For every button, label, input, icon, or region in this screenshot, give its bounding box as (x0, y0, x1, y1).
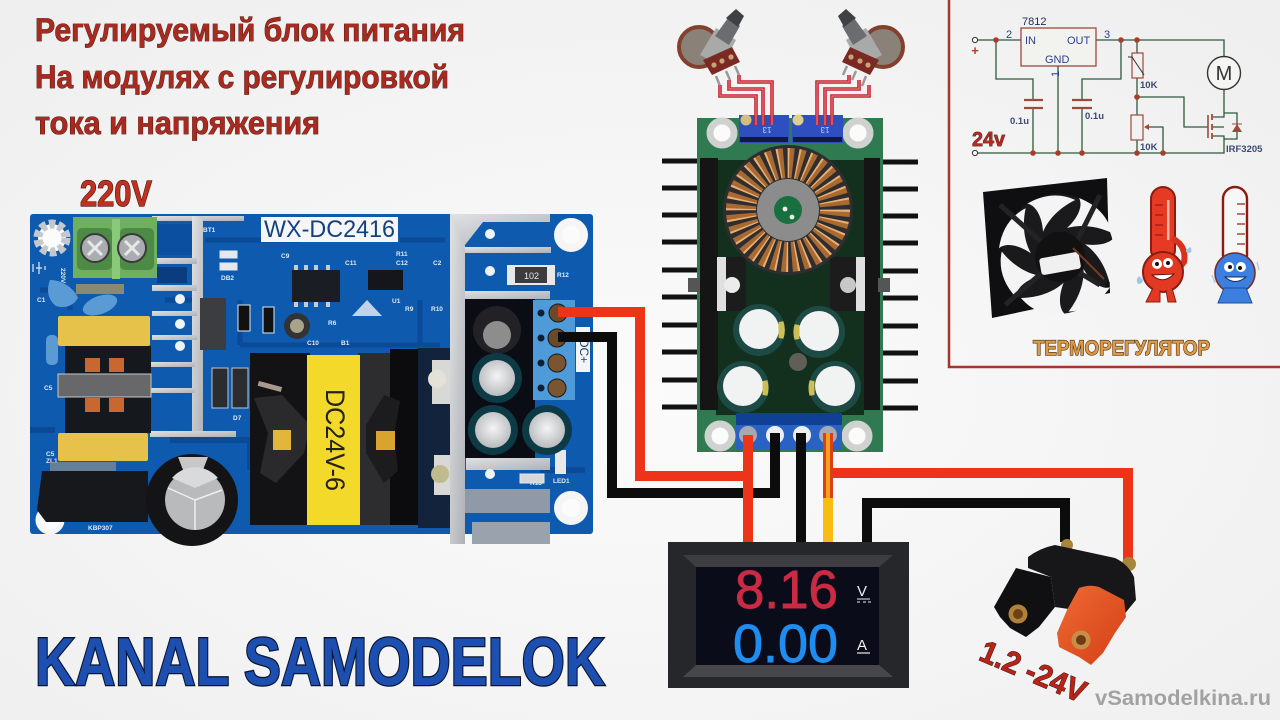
thermistor: 10K (1140, 80, 1158, 91)
icon: hot thermometer (1137, 187, 1192, 302)
bridge rectifier (37, 462, 148, 522)
trimmer: 10K (1140, 142, 1158, 153)
pcb base (30, 214, 593, 534)
regulator chip: 7812 (1022, 16, 1046, 28)
model label: WX-DC2416 (264, 216, 395, 243)
silkscreen labels: R2 (224, 265, 233, 272)
MOSFET (1208, 114, 1263, 155)
DC output terminal block: -DC+ (577, 335, 591, 363)
label: output voltage range: 1.2 -24V (975, 634, 1092, 710)
junction nodes (993, 37, 1166, 156)
silkscreen labels: KBP307 (88, 525, 113, 532)
circuit diagram: + (971, 43, 979, 58)
silkscreen labels: C1 (37, 297, 46, 304)
silkscreen labels: R11 (396, 251, 408, 258)
panel: DC-DC step-down module (662, 114, 918, 452)
mount pads (38, 222, 584, 532)
silkscreen labels: C12 (396, 260, 408, 267)
AC terminal block (73, 217, 157, 279)
blue X capacitors (46, 280, 120, 365)
silkscreen labels: R12 (557, 272, 569, 279)
mount holes (708, 121, 870, 448)
black post (994, 568, 1055, 637)
watermark: vSamodelkina.ru (1095, 687, 1271, 710)
SMD parts and ICs (200, 251, 566, 483)
green board (697, 118, 883, 452)
unit labels: V (857, 583, 867, 600)
silkscreen labels (37, 227, 570, 532)
blue trimmers (739, 114, 843, 143)
trimmer (1131, 115, 1158, 153)
unit labels (857, 583, 871, 654)
current reading: 0.00 (733, 614, 838, 674)
silkscreen labels: C5 (44, 385, 53, 392)
silkscreen labels: BT1 (203, 227, 216, 234)
silkscreen labels: R5 (224, 253, 233, 260)
regulator chip (1006, 16, 1110, 77)
blue trimmers: 13 (820, 125, 829, 134)
panel: thermostat (949, 0, 1280, 367)
silkscreen labels: U1 (392, 298, 401, 305)
title: тока и напряжения (35, 105, 320, 141)
wires between supply and module (558, 312, 1128, 562)
silkscreen labels: D7 (233, 415, 242, 422)
regulator chip: 3 (1104, 29, 1110, 41)
silkscreen labels: C5 (46, 451, 55, 458)
silkscreen labels: DB2 (221, 275, 234, 282)
common mode choke (58, 346, 151, 433)
circuit diagram (971, 16, 1263, 156)
panel border (949, 0, 1280, 367)
yellow safety capacitors (58, 316, 150, 461)
silkscreen labels: R13 (530, 480, 542, 487)
regulator chip: IN (1025, 35, 1036, 47)
right heatsink (418, 214, 551, 544)
silkscreen labels: B1 (341, 340, 350, 347)
motor: M (1216, 63, 1232, 85)
icon: cooling fan (983, 178, 1137, 329)
voltage reading: 8.16 (735, 560, 838, 620)
SMD parts and ICs: 102 (524, 271, 539, 281)
silkscreen labels: C2 (433, 260, 442, 267)
output screw terminal (736, 413, 842, 450)
silkscreen labels: C11 (345, 260, 357, 267)
circuit diagram: 0.1u (1010, 116, 1029, 127)
thermistor (1128, 53, 1158, 91)
capacitors (1024, 100, 1092, 108)
regulator chip: 2 (1006, 29, 1012, 41)
title: Регулируемый блок питания (35, 12, 465, 48)
title (35, 12, 465, 141)
regulator chip: OUT (1067, 35, 1090, 47)
transformer (250, 349, 418, 525)
MOSFET: IRF3205 (1226, 144, 1263, 155)
unit labels: A (857, 637, 867, 654)
title: На модулях с регулировкой (35, 59, 449, 95)
silkscreen labels: R10 (431, 306, 443, 313)
yellow transformer label (307, 355, 360, 525)
silkscreen labels: LED1 (553, 478, 570, 485)
panel: AC-DC power supply board (30, 214, 593, 546)
output section with capacitors (465, 299, 572, 458)
blue trimmers: 13 (762, 125, 771, 134)
silkscreen labels: C9 (281, 253, 290, 260)
potentiometer wires (720, 75, 869, 125)
red post (1057, 586, 1126, 665)
main electrolytic capacitor (146, 454, 238, 546)
24v label: 24v (972, 129, 1006, 151)
thermostat caption: ТЕРМОРЕГУЛЯТОР (1033, 337, 1210, 360)
icon: right potentiometer (838, 9, 903, 86)
panel: digital voltmeter ammeter (668, 542, 909, 688)
regulator chip: GND (1045, 54, 1070, 66)
motor (1208, 56, 1240, 90)
left silver heatsink (150, 216, 244, 437)
icon: cold thermometer (1212, 187, 1259, 303)
toroid inductor (723, 145, 853, 275)
module capacitors (717, 304, 861, 413)
regulator chip: 1 (1050, 71, 1062, 77)
black heatsink bars (700, 158, 718, 410)
panel: AC-DC power supply board: 220V (59, 268, 66, 284)
label: 220V input: 220V (80, 173, 152, 214)
silkscreen labels: C10 (307, 340, 319, 347)
silkscreen labels: ZL1 (46, 458, 58, 465)
DC output terminal block (533, 300, 591, 400)
yellow transformer label: DC24V-6 (320, 389, 350, 491)
silkscreen labels: R9 (405, 306, 414, 313)
heatsink fins (662, 161, 918, 408)
icon: left potentiometer (679, 9, 744, 86)
silkscreen labels: R6 (328, 320, 337, 327)
circuit diagram: 0.1u (1085, 111, 1104, 122)
channel name: KANAL SAMODELOK (35, 624, 605, 700)
icon: binding post terminals (994, 539, 1136, 665)
